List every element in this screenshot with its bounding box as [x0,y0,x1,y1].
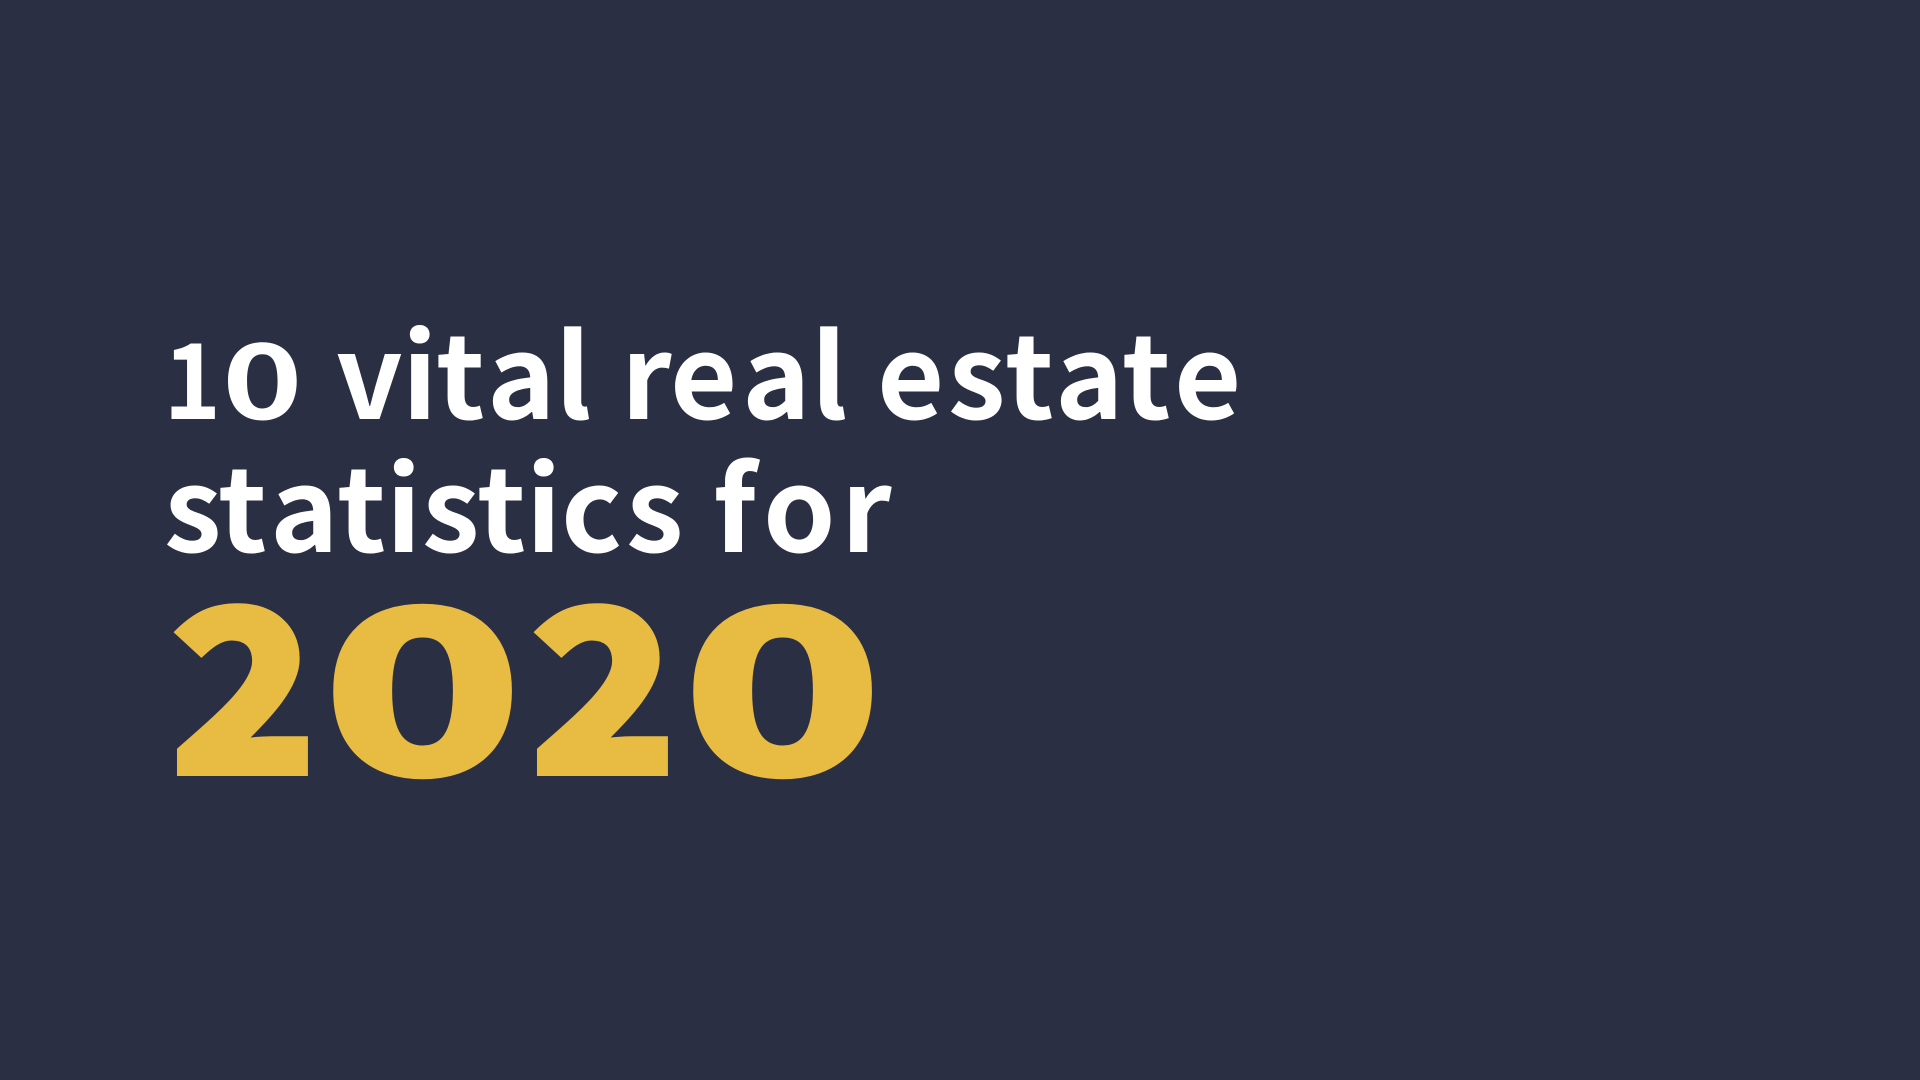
heading number 10 [164,299,303,450]
heading line 1: vital real estate [336,285,1241,453]
heading line 2: statistics for [164,418,892,586]
heading number 10: 1 [164,299,221,450]
digit 0: 0 [681,508,884,842]
digit 2: 2 [530,512,677,839]
digit 2: 2 [170,512,317,839]
year 2020 [170,508,884,842]
digit 0: 0 [321,508,524,842]
heading number 10: 0 [222,299,303,450]
heading [164,285,1241,586]
